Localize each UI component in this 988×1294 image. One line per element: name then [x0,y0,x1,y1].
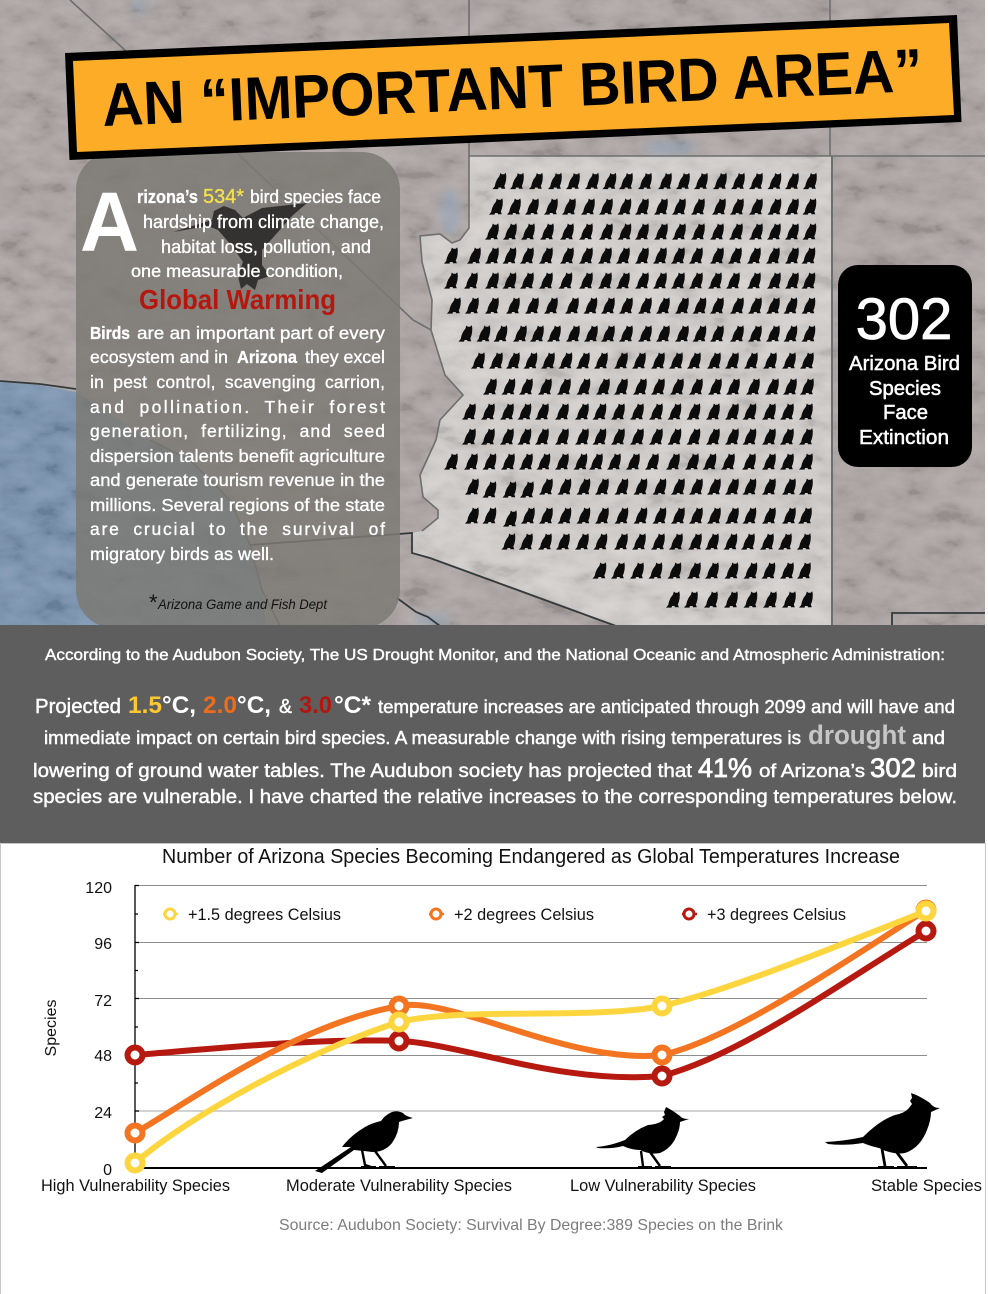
text panel [76,152,400,628]
y axis labels: 24 [94,1105,112,1122]
legend: +3 degrees Celsius [707,906,846,924]
series: +2 degrees [128,902,934,1140]
title banner [65,15,962,160]
icon: low vulnerability bird [596,1107,689,1167]
summary paragraph: 302 [870,753,916,783]
line chart [41,880,982,1195]
summary paragraph: °C, [162,692,196,719]
summary paragraph: 3.0 [299,692,332,719]
body text: and generate tourism revenue in the [90,470,385,490]
summary paragraph [33,692,957,808]
summary paragraph: temperature increases are anticipated through 2099 and will have and [378,697,955,717]
body text: and pollination. Their forest [90,397,385,417]
footnote: Arizona Game and Fish Dept [157,597,328,612]
icon: hummingbird silhouette [173,203,307,290]
callout number: 302 [856,287,952,352]
x axis labels [41,1177,982,1195]
legend: +1.5 degrees Celsius [188,906,341,924]
y axis title: Species [43,1000,60,1056]
y axis labels: 48 [94,1048,112,1065]
heading: global warming: Global Warming [139,284,336,315]
summary paragraph: 1.5 [128,692,162,719]
x axis labels: Moderate Vulnerability Species [286,1177,512,1195]
series: +1.5 degrees [128,904,934,1170]
y axis labels [85,880,112,1179]
summary paragraph: of Arizona’s [759,761,865,781]
summary paragraph: °C* [334,692,372,719]
summary paragraph: 2.0 [203,692,237,719]
icon: stable species bird [825,1093,940,1167]
body text: Birds [90,323,130,343]
body text: in pest control, scavenging carrion, [90,372,385,392]
intro text: one measurable condition, [131,261,343,281]
callout label: Arizona Bird [849,353,960,375]
intro text: habitat loss, pollution, and [161,236,371,257]
ocean [0,382,266,626]
intro text: 534* [203,186,244,208]
summary paragraph: and [912,728,945,748]
chart title: Number of Arizona Species Becoming Endangered as Global Temperatures Increase [162,846,900,868]
summary paragraph: drought [808,720,906,750]
summary paragraph: bird [922,761,957,781]
summary paragraph: species are vulnerable. I have charted the relative increases to the corresponding temperatures below. [33,787,957,808]
summary paragraph: immediate impact on certain bird species. A measurable change with rising temperatures is [44,728,801,748]
title: AN “IMPORTANT BIRD AREA” [101,36,924,139]
body text: generation, fertilizing, and seed [90,421,385,441]
state borders [70,0,985,626]
y axis [135,885,139,1168]
grid lines [135,886,927,1111]
y axis labels: 0 [103,1162,112,1179]
sources line: According to the Audubon Society, The US Drought Monitor, and the National Oceanic and Atmospheric Administration: [45,647,945,664]
body text: migratory birds as well. [90,544,274,564]
body text: dispersion talents benefit agriculture [90,446,385,466]
summary paragraph: 41% [698,753,752,783]
x axis labels: Stable Species [871,1177,982,1195]
legend: +2 degrees Celsius [454,906,594,924]
drop cap: A [80,175,139,269]
icon: moderate vulnerability bird [315,1111,413,1173]
body text: are crucial to the survival of [90,519,385,539]
water features [132,0,696,626]
intro text [80,175,384,281]
panel: summary band [0,625,985,843]
x axis labels: High Vulnerability Species [41,1177,230,1195]
footnote: * [149,590,158,615]
body text: are an important part of every [137,323,385,343]
y axis labels: 96 [94,936,112,953]
panel: chart background [0,844,986,1294]
footnote [149,590,328,615]
owl pictogram grid [444,173,817,608]
series: +3 degrees [128,924,934,1084]
y axis labels: 72 [94,993,112,1010]
body text: ecosystem and in [90,347,228,367]
summary paragraph: Projected [35,696,121,718]
callout label: Species [869,378,941,400]
x axis labels: Low Vulnerability Species [570,1177,756,1195]
body text: millions. Several regions of the state [90,495,385,515]
callout label [849,353,960,449]
callout: 302 species [838,265,972,467]
legend [163,906,846,924]
intro text: bird species face [250,186,381,207]
body text: they excel [305,347,385,367]
callout label: Extinction [859,427,949,449]
source note: Source: Audubon Society: Survival By Degree:389 Species on the Brink [279,1217,784,1234]
intro text: hardship from climate change, [143,211,384,232]
arizona state area [412,156,832,626]
summary paragraph: & [279,696,293,718]
body text [90,323,385,564]
summary paragraph: lowering of ground water tables. The Audubon society has projected that [33,761,693,782]
background map [0,0,985,626]
intro text: rizona’s [137,186,198,207]
terrain texture [0,0,985,626]
body text: Arizona [237,347,297,367]
callout label: Face [883,402,928,424]
summary paragraph: °C, [237,692,271,719]
y axis labels: 120 [85,880,112,897]
